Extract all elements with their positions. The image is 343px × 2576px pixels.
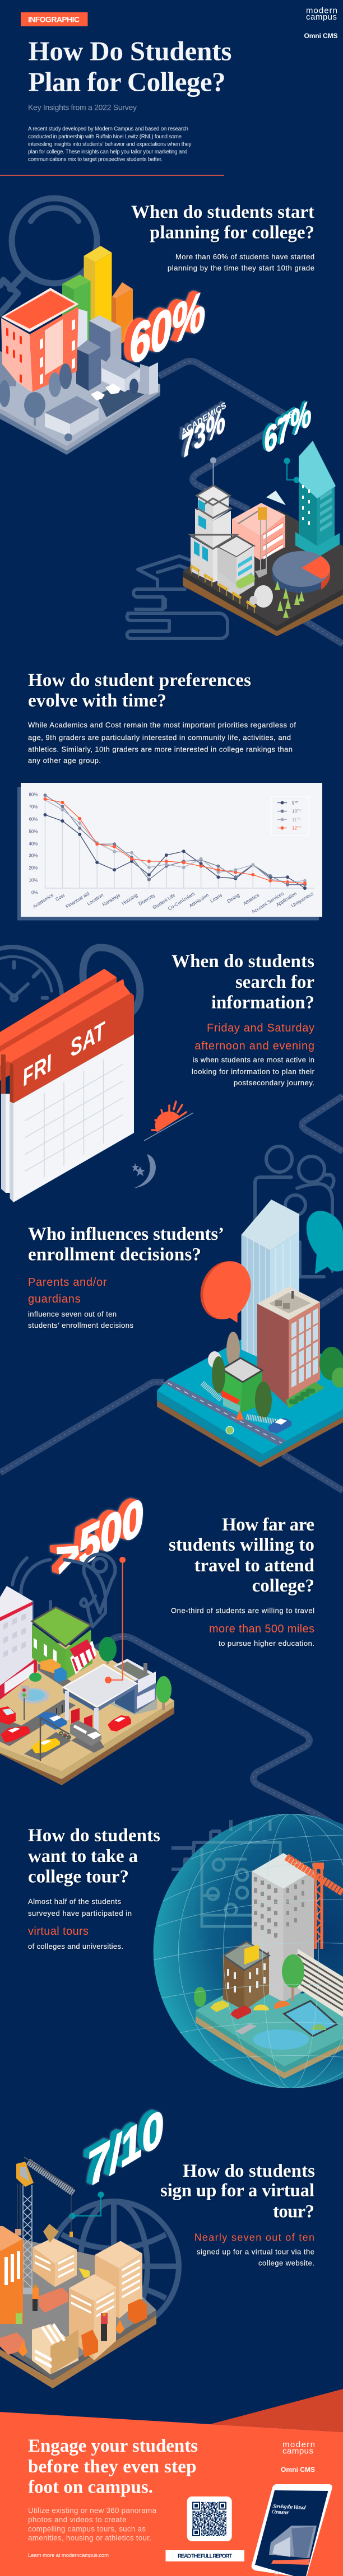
highlight: parents and guardians: Parents and/or bbox=[28, 1276, 107, 1289]
icon: globe with pin bbox=[12, 1554, 115, 1627]
report title: Serving the Virtual bbox=[272, 2503, 307, 2511]
highlight: parents and guardians bbox=[28, 1276, 107, 1305]
heading: how far bbox=[169, 1515, 314, 1596]
icon: globe bbox=[49, 2201, 179, 2331]
heading: virtual tour signup: sign up for a virtual bbox=[160, 2181, 314, 2201]
category labels: Rankings bbox=[101, 892, 121, 907]
bar chart buildings bbox=[62, 246, 133, 358]
highlight: 500 miles: more than 500 miles bbox=[209, 1623, 314, 1635]
striped building bbox=[298, 1949, 343, 2017]
text: influence: influence seven out of ten bbox=[28, 1310, 117, 1318]
panel: line chart bbox=[21, 783, 322, 917]
icon: family bbox=[255, 1146, 334, 1277]
circuit chip seen through sphere bbox=[194, 1820, 280, 1926]
cars bbox=[0, 1706, 131, 1753]
heading: how far: students willing to bbox=[169, 1535, 314, 1555]
chart legend: 9 bbox=[292, 801, 294, 805]
callout: 60 percent: 60% bbox=[128, 281, 206, 377]
illustration: construction site bbox=[0, 2157, 156, 2388]
fountain bbox=[18, 1688, 49, 1704]
callout: cost 67 percent: 67% bbox=[262, 393, 313, 461]
text: preferences explanation: While Academics and Cost remain the most important priorities regardless of bbox=[28, 721, 296, 729]
town platform bbox=[0, 1635, 174, 1785]
category labels: Account Services bbox=[251, 890, 285, 914]
orange speech bubble bbox=[192, 1254, 259, 1326]
highlight: parents and guardians: guardians bbox=[28, 1293, 81, 1305]
category labels: Academics bbox=[32, 892, 54, 909]
text: signed up via website: college website. bbox=[258, 2259, 314, 2267]
pin: academics marker bbox=[210, 457, 216, 497]
heading: student preferences: evolve with time? bbox=[28, 691, 166, 711]
heading: how far: How far are bbox=[222, 1515, 314, 1535]
text: colleges and universities: of colleges and universities. bbox=[28, 1942, 123, 1950]
heading: who influences bbox=[28, 1224, 224, 1265]
illustration: campus in virtual sphere bbox=[154, 1814, 343, 2088]
highlight: friday and saturday bbox=[194, 1022, 314, 1052]
category labels: Dining bbox=[226, 892, 240, 904]
footer logos bbox=[281, 2440, 315, 2474]
heading: who influences: Who influences students’ bbox=[28, 1224, 224, 1244]
panel: footer call to action bbox=[0, 2389, 343, 2576]
pool furniture and cars bbox=[210, 2000, 326, 2034]
illustration: influencers city block bbox=[157, 1200, 343, 1467]
icon: magnifying glass bbox=[0, 198, 97, 314]
heading: who influences: enrollment decisions? bbox=[28, 1245, 201, 1265]
callout: academics 73 percent: 73% bbox=[180, 402, 226, 465]
category labels: Admission bbox=[188, 892, 210, 908]
category labels bbox=[32, 890, 314, 914]
text: signed up via website bbox=[197, 2248, 314, 2267]
chart legend: TH bbox=[297, 809, 301, 813]
intro paragraph: communications mix to target prospective students better. bbox=[28, 157, 163, 162]
footer heading: before they even step bbox=[28, 2457, 196, 2477]
green shop bbox=[220, 1358, 262, 1413]
text: signed up via website: signed up for a virtual tour via the bbox=[197, 2248, 314, 2256]
button: read the full report bbox=[166, 2550, 244, 2561]
brown building bbox=[223, 1942, 269, 2010]
illustration: town with gas station bbox=[0, 1586, 174, 1785]
glass tower bbox=[241, 1200, 299, 1362]
category labels: Financial aid bbox=[64, 890, 90, 909]
logos: Modern Campus and Omni CMS: modern bbox=[306, 6, 337, 16]
road lights pole bbox=[40, 1718, 71, 1761]
text: more than 60 percent: More than 60% of students have started bbox=[175, 253, 314, 261]
heading: when do students start planning: When do students start bbox=[131, 202, 314, 222]
illustration: calendar bbox=[0, 969, 134, 1202]
intro paragraph: interesting insights into students’ behavior and expectations when they bbox=[28, 141, 192, 148]
heading: virtual tour signup bbox=[160, 2161, 315, 2222]
report title: Consumer bbox=[271, 2509, 290, 2516]
crane bbox=[286, 1857, 343, 1949]
white tower bbox=[0, 1586, 37, 1700]
text: most active: is when students are most active in bbox=[193, 1056, 314, 1064]
title bbox=[28, 36, 232, 97]
calendar day labels: SAT bbox=[69, 1016, 108, 1062]
intro paragraph: plan for college. These insights can help you tailor your marketing and bbox=[28, 149, 187, 155]
text: preferences explanation bbox=[28, 721, 296, 765]
series: 11th bbox=[45, 800, 307, 883]
heading: how far: college? bbox=[252, 1576, 314, 1596]
brick building bbox=[257, 1286, 320, 1407]
illustration: tablet with report cover bbox=[252, 2484, 332, 2576]
y axis labels: 60% bbox=[29, 816, 38, 822]
logos: Modern Campus and Omni CMS: Omni CMS bbox=[304, 32, 337, 40]
crane bbox=[15, 2157, 73, 2294]
heading: college tour: want to take a bbox=[28, 1846, 138, 1866]
text: almost half: Almost half of the students bbox=[28, 1897, 121, 1906]
grey tower bbox=[252, 1853, 314, 2002]
heading: virtual tour signup: How do students bbox=[183, 2161, 315, 2181]
intro paragraph: A recent study developed by Modern Campus and based on research bbox=[28, 126, 188, 132]
intro paragraph bbox=[28, 126, 192, 162]
category labels: Application bbox=[275, 890, 298, 908]
series: 10th bbox=[44, 794, 307, 886]
chart panel shadow bbox=[17, 787, 319, 921]
category labels: Diversity bbox=[137, 892, 156, 907]
text: most active bbox=[192, 1056, 315, 1087]
title: Plan for College? bbox=[28, 67, 225, 97]
text: preferences explanation: age, 9th graders are particularly interested in community life, activities, and bbox=[28, 734, 291, 742]
orange building bbox=[0, 2226, 23, 2324]
category labels: Loans bbox=[209, 892, 223, 904]
text: more than 60 percent bbox=[168, 253, 314, 272]
y axis labels: 30% bbox=[29, 853, 38, 858]
chart legend: 11 bbox=[292, 818, 296, 822]
text: almost half: surveyed have participated in bbox=[28, 1909, 132, 1917]
heading: student preferences bbox=[28, 670, 251, 711]
QR code bbox=[187, 2496, 232, 2541]
footer text: Utilize existing or new 360 panorama bbox=[28, 2507, 156, 2515]
heading: college tour: college tour? bbox=[28, 1867, 129, 1887]
y axis labels bbox=[29, 792, 38, 895]
chart legend: 10 bbox=[292, 809, 297, 814]
sphere meridians bbox=[154, 1814, 343, 2088]
sphere platform bbox=[196, 1992, 343, 2079]
button: read the full report: READ THE FULL REPORT bbox=[178, 2554, 232, 2559]
icon: calendar ring bbox=[83, 948, 140, 1015]
category labels: Cost bbox=[54, 892, 66, 902]
highlight: nearly seven out of ten: Nearly seven out of ten bbox=[194, 2232, 314, 2243]
footer text: photos and videos to create bbox=[28, 2516, 127, 2524]
category labels: Athletics bbox=[242, 892, 260, 907]
footer text: compelling campus tours, such as bbox=[28, 2525, 146, 2533]
y axis labels: 10% bbox=[29, 878, 38, 883]
y axis labels: 80% bbox=[29, 792, 38, 797]
footer link: Learn more at moderncampus.com bbox=[28, 2552, 109, 2559]
illustration: construction campus with pie chart bbox=[183, 441, 343, 636]
teal speech bubble bbox=[307, 1211, 343, 1274]
text: almost half bbox=[28, 1897, 132, 1917]
bricks and materials bbox=[0, 2268, 147, 2358]
heading: when do students search: search for bbox=[235, 972, 314, 992]
pin: cost marker bbox=[285, 458, 299, 483]
report title bbox=[271, 2503, 307, 2516]
text: preferences explanation: any other age group. bbox=[28, 757, 101, 765]
heading: when do students search bbox=[172, 951, 314, 1013]
highlight: friday and saturday: afternoon and evening bbox=[194, 1040, 314, 1052]
icon: clock bbox=[0, 947, 62, 1001]
title: How Do Students bbox=[28, 36, 232, 66]
chart legend: TH bbox=[297, 826, 301, 829]
category labels: Student Life bbox=[151, 892, 176, 911]
workers and cones bbox=[16, 2285, 124, 2356]
footer heading bbox=[28, 2436, 198, 2498]
barriers, rocks and trees bbox=[191, 566, 304, 618]
category labels: Uniqueness bbox=[290, 890, 314, 908]
calendar day labels bbox=[21, 1016, 108, 1091]
badge: infographic: INFOGRAPHIC bbox=[28, 15, 80, 24]
text: one third: One-third of students are willing to travel bbox=[171, 1607, 314, 1615]
footer text bbox=[28, 2507, 156, 2542]
text: most active: postsecondary journey. bbox=[234, 1079, 314, 1087]
chart legend: 12 bbox=[292, 825, 297, 831]
y axis labels: 50% bbox=[29, 829, 38, 834]
y axis labels: 0% bbox=[31, 890, 38, 895]
heading: when do students search: When do students bbox=[172, 951, 314, 972]
heading: college tour bbox=[28, 1826, 160, 1887]
highlight: friday and saturday: Friday and Saturday bbox=[207, 1022, 314, 1034]
text: higher education: to pursue higher education. bbox=[219, 1639, 314, 1648]
calendar day labels: FRI bbox=[21, 1049, 54, 1091]
connector: virtual tour pin bbox=[69, 2192, 104, 2219]
heading: virtual tour signup: tour? bbox=[273, 2202, 314, 2222]
heading: when do students start planning: planning for college? bbox=[150, 222, 314, 242]
footer logos: Omni CMS bbox=[281, 2466, 315, 2474]
icon: moon and stars bbox=[132, 1154, 156, 1188]
pink building bbox=[232, 503, 285, 578]
chart legend: TH bbox=[296, 818, 300, 821]
text: influence bbox=[28, 1310, 133, 1329]
logos: Modern Campus and Omni CMS: campus bbox=[306, 12, 337, 22]
text: most active: looking for information to plan their bbox=[192, 1067, 315, 1076]
category labels: Location bbox=[86, 892, 104, 907]
footer text: amenities, housing or athletics tour. bbox=[28, 2534, 151, 2542]
chart legend bbox=[271, 796, 309, 836]
category labels: Housing bbox=[120, 892, 138, 906]
text: more than 60 percent: planning by the time they start 10th grade bbox=[168, 264, 314, 272]
road network bbox=[0, 361, 343, 1830]
badge: infographic bbox=[21, 12, 87, 26]
traffic light bbox=[21, 1686, 29, 1720]
heading: student preferences: How do student preferences bbox=[28, 670, 251, 690]
heading: when do students start planning bbox=[131, 202, 314, 242]
pie chart bbox=[272, 551, 330, 593]
series: 9th bbox=[44, 813, 307, 890]
footer logos: modern bbox=[282, 2440, 315, 2449]
callout: more than 500: >500 bbox=[53, 1488, 146, 1588]
icon: sunset bbox=[144, 1102, 193, 1141]
callout: 7 out of 10: 7/10 bbox=[86, 2101, 166, 2196]
icon: circuit chip bbox=[172, 1820, 280, 1950]
tree bbox=[156, 1676, 172, 1710]
series: 12th bbox=[44, 797, 307, 885]
icon: graduation cap and books bbox=[127, 556, 228, 638]
heading: college tour: How do students bbox=[28, 1826, 160, 1846]
town roads bbox=[0, 1663, 104, 1760]
truck bbox=[40, 1659, 67, 1683]
subtitle: Key Insights from a 2022 Survey bbox=[28, 103, 137, 112]
text: preferences explanation: athletics. Similarly, 10th graders are more interested in college rankings than bbox=[28, 745, 293, 754]
connector: 500 miles pin bbox=[105, 1557, 126, 1683]
heading: when do students search: information? bbox=[211, 993, 314, 1013]
callout: academics 73 percent: ACADEMICS bbox=[180, 400, 227, 438]
category labels: Co-Curriculars bbox=[167, 890, 196, 912]
tan buildings bbox=[32, 2224, 142, 2374]
heading: how far: travel to attend bbox=[194, 1556, 314, 1576]
illustration: coral campus with bar chart bbox=[0, 246, 160, 455]
footer heading: Engage your students bbox=[28, 2436, 198, 2456]
y axis labels: 20% bbox=[29, 866, 38, 870]
footer logos: campus bbox=[282, 2447, 313, 2456]
footer heading: foot on campus. bbox=[28, 2477, 153, 2498]
logos: Modern Campus and Omni CMS bbox=[304, 6, 337, 40]
intro paragraph: conducted in partnership with Ruffalo Noel Levitz (RNL) found some bbox=[28, 134, 182, 140]
y axis labels: 70% bbox=[29, 804, 38, 810]
teal tower bbox=[266, 441, 340, 558]
callout: cost 67 percent: COST bbox=[277, 406, 298, 428]
gas station bbox=[63, 1659, 157, 1735]
highlight: virtual tours: virtual tours bbox=[28, 1925, 89, 1938]
grey towers bbox=[191, 486, 254, 596]
green shop bbox=[32, 1607, 96, 1680]
y axis labels: 40% bbox=[29, 841, 38, 847]
coral building bbox=[1, 288, 78, 392]
chart legend: TH bbox=[294, 801, 299, 804]
text: influence: students’ enrollment decisions bbox=[28, 1321, 133, 1329]
